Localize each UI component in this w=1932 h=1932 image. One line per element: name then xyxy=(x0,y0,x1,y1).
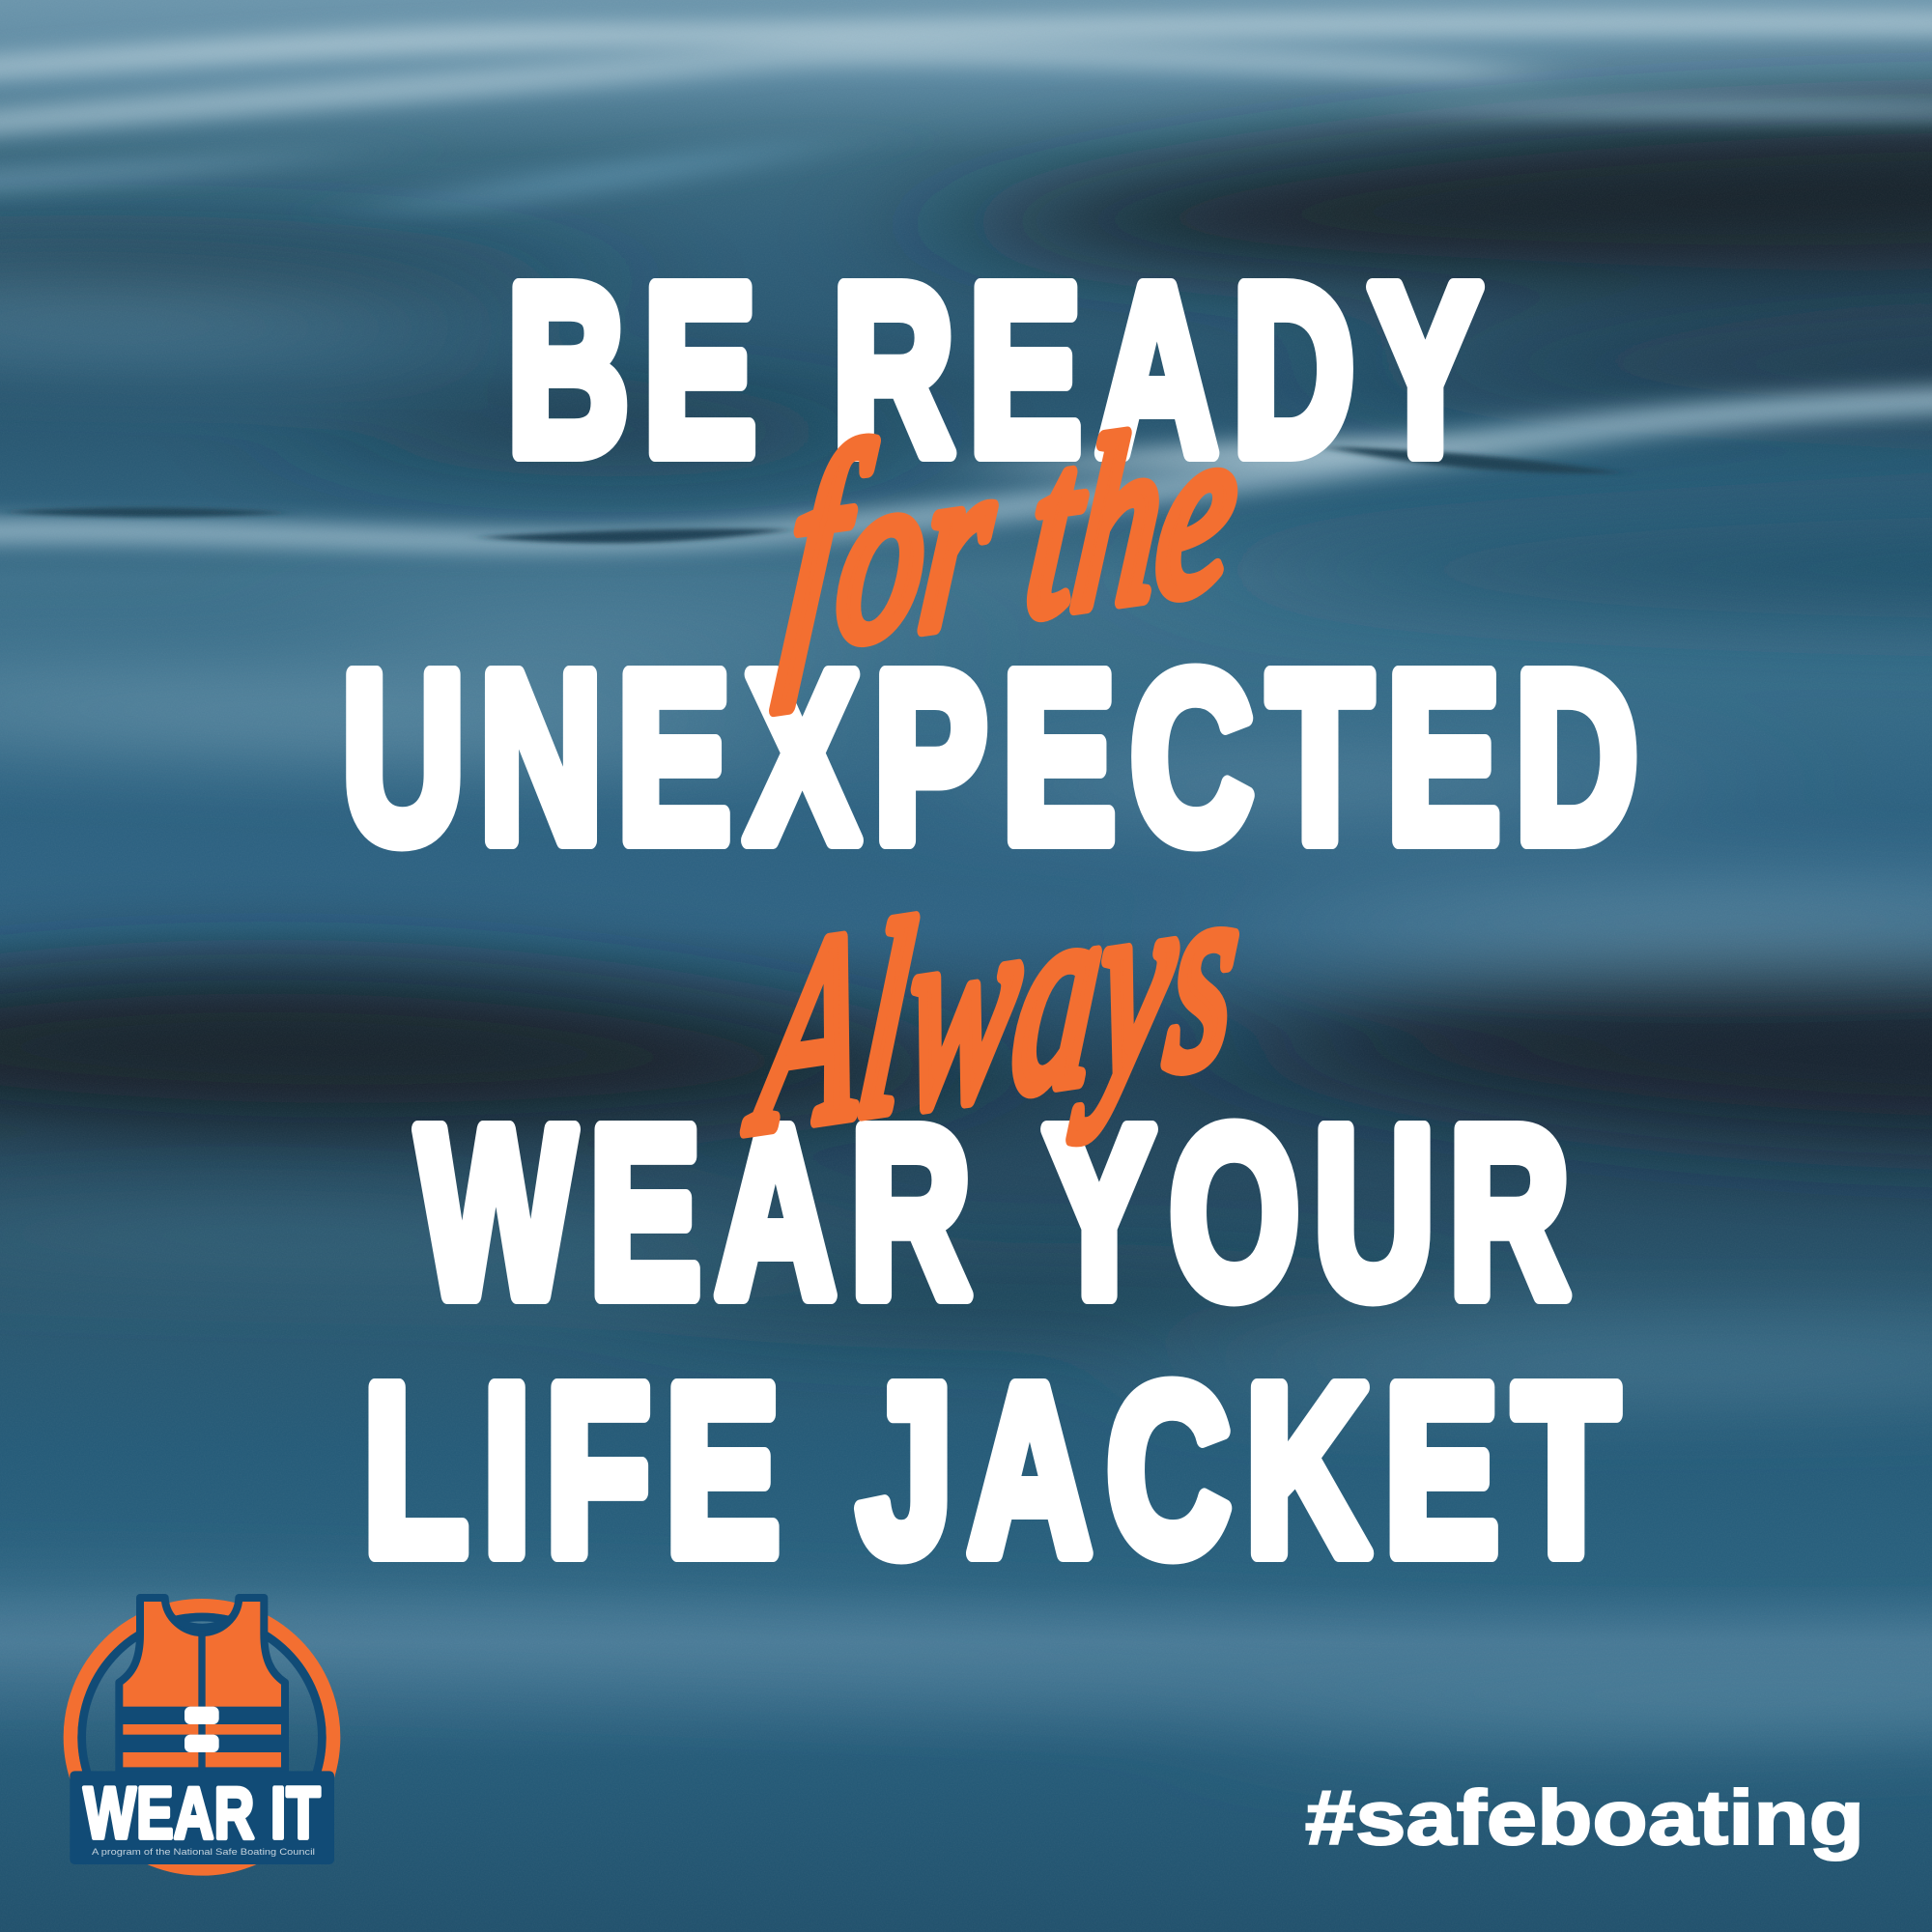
logo banner xyxy=(70,1771,334,1864)
logo banner: A program of the National Safe Boating Council xyxy=(92,1847,315,1857)
logo ring xyxy=(71,1605,333,1868)
hashtag: #safeboating xyxy=(1305,1775,1864,1861)
icon: life jacket vest xyxy=(119,1598,285,1773)
script: Always: Always xyxy=(737,817,1252,1190)
heading line: BE READY: BE READY xyxy=(507,235,1496,504)
logo banner: WEAR IT xyxy=(84,1773,321,1854)
script: for the: for the xyxy=(772,334,1253,711)
logo: Wear It life jacket badge xyxy=(70,1598,334,1868)
